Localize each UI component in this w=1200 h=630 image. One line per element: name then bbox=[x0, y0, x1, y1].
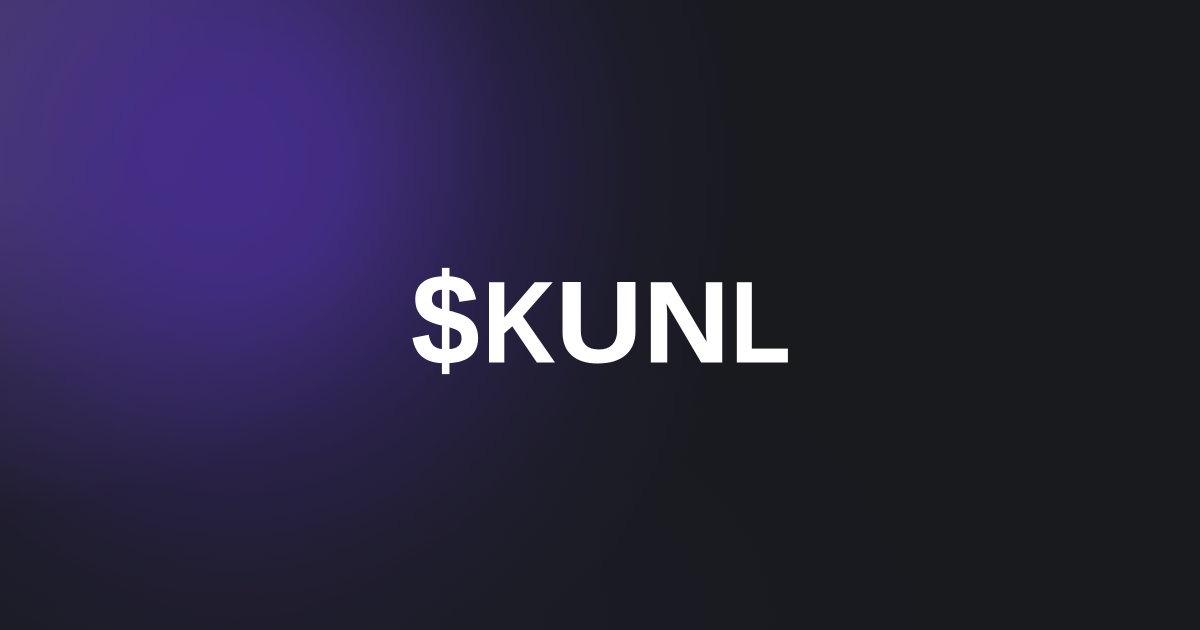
title: L bbox=[731, 257, 791, 387]
title: $ bbox=[412, 247, 479, 392]
title: U bbox=[556, 258, 642, 387]
title: K bbox=[483, 257, 555, 387]
title: N bbox=[643, 258, 730, 387]
